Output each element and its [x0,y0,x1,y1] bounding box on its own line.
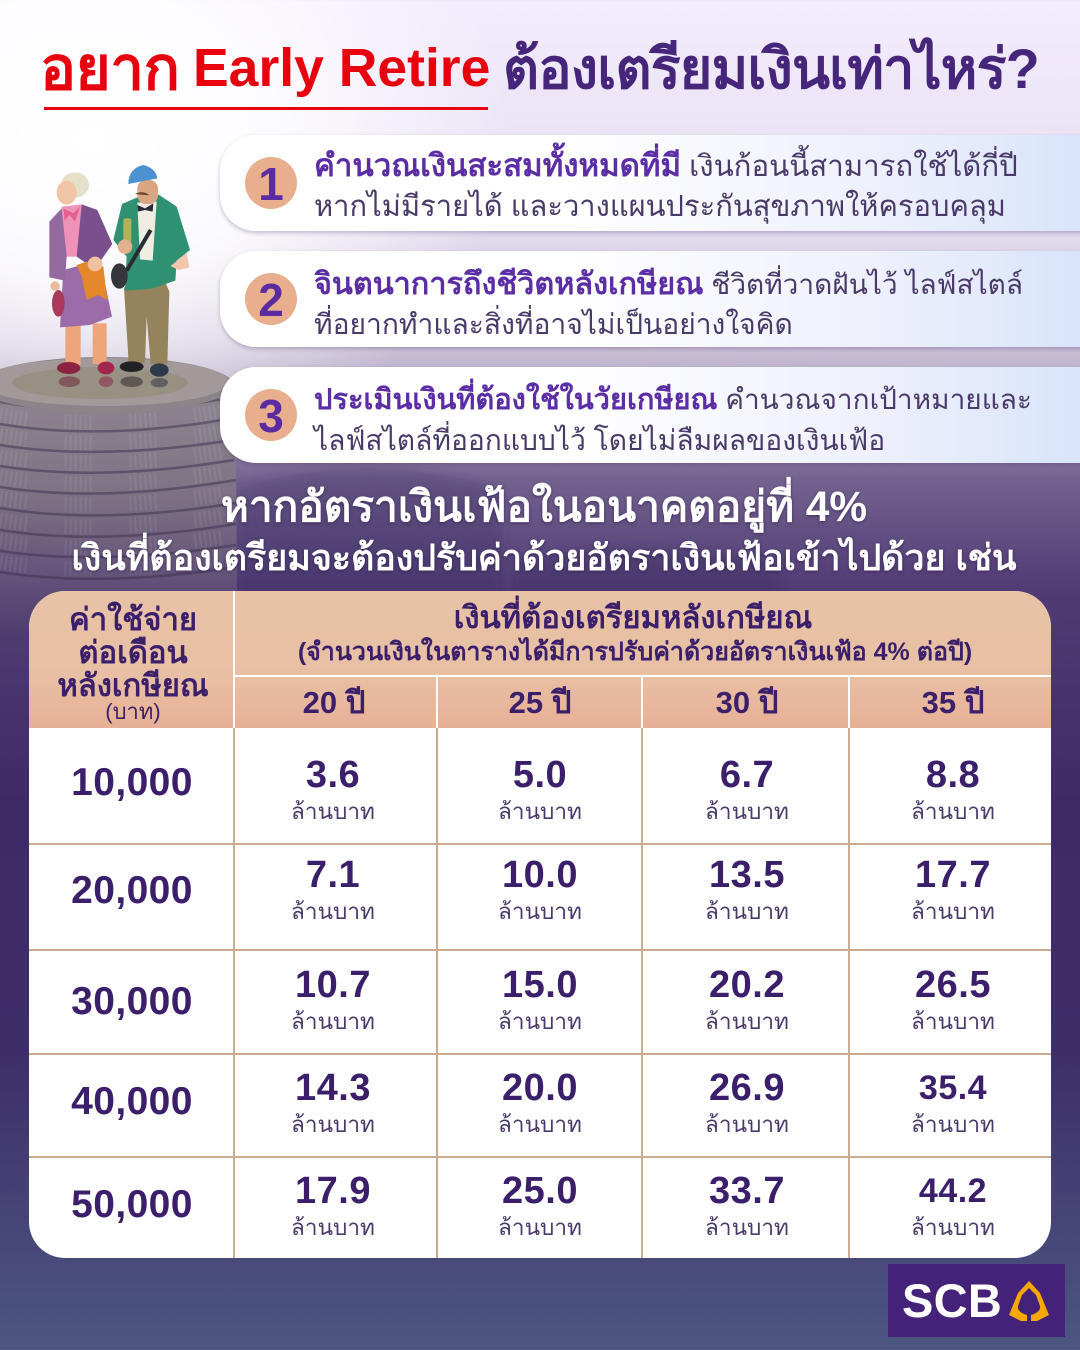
step number 2: 2 [258,274,284,326]
row 40,000: 14.3 [295,1067,371,1109]
row 10,000: 10,000 [71,761,193,804]
figurine reflections [59,376,168,387]
row 20,000: 17.7 [915,854,991,896]
subheading: หากอัตราเงินเฟ้อในอนาคตอยู่ที่ 4% [221,483,867,530]
step number 1: 1 [258,158,284,210]
row 20,000: 10.0 [502,854,578,896]
row 50,000: ล้านบาท [498,1215,582,1240]
row 20,000: 20,000 [71,869,193,912]
row 50,000: 25.0 [502,1170,578,1212]
icon: gold bai sema [1009,1281,1049,1321]
row 10,000: 5.0 [513,754,567,796]
row 30,000: 30,000 [71,980,193,1023]
coin stack photo [0,357,237,626]
column header: monthly expense: ต่อเดือน [78,635,188,670]
title: อยาก [40,35,180,102]
row 30,000: 15.0 [502,964,578,1006]
row 30,000: 26.5 [915,964,991,1006]
row 40,000: 26.9 [709,1067,785,1109]
year columns: 25 ปี [509,685,571,720]
row 10,000: ล้านบาท [291,799,375,824]
row 40,000: 35.4 [919,1069,987,1107]
step number 3 [245,389,297,441]
row 40,000: ล้านบาท [911,1112,995,1137]
row 20,000: ล้านบาท [911,899,995,924]
column header: savings needed [298,596,972,666]
row 10,000: ล้านบาท [498,799,582,824]
row 50,000 [71,1170,995,1240]
step number 1 [245,157,297,209]
row 30,000: 20.2 [709,964,785,1006]
background blurred coin stacks [236,466,770,580]
old couple figurines [49,165,190,388]
step 1 text: หากไม่มีรายได้ และวางแผนประกันสุขภาพให้ครอบคลุม [314,191,1006,223]
man figurine [111,165,190,377]
row 40,000 [71,1067,995,1137]
column header: monthly expense: (บาท) [105,699,161,724]
row 30,000: 10.7 [295,964,371,1006]
row 50,000: 50,000 [71,1183,193,1226]
row 50,000: ล้านบาท [705,1215,789,1240]
column header: savings needed: (จำนวนเงินในตารางได้มีการปรับค่าด้วยอัตราเงินเฟ้อ 4% ต่อปี) [298,638,972,666]
step 2 text: ที่อยากทำและสิ่งที่อาจไม่เป็นอย่างใจคิด [314,308,793,340]
table header [29,591,1051,728]
row 40,000: ล้านบาท [705,1112,789,1137]
panel: step 2 [220,251,1080,347]
row 20,000: 7.1 [306,854,360,896]
step 1 text: คำนวณเงินสะสมทั้งหมดที่มี เงินก้อนนี้สามารถใช้ได้กี่ปี [314,148,1018,183]
row 30,000 [71,964,995,1034]
row 30,000: ล้านบาท [705,1009,789,1034]
column header: savings needed: เงินที่ต้องเตรียมหลังเกษียณ [454,600,812,635]
row 40,000: ล้านบาท [498,1112,582,1137]
row 50,000: 44.2 [919,1172,987,1210]
row 20,000: ล้านบาท [291,899,375,924]
step 3 text: ไลฟ์สไตล์ที่ออกแบบไว้ โดยไม่ลืมผลของเงินเฟ้อ [314,424,885,456]
row 20,000: 13.5 [709,854,785,896]
panel: step 1 [220,135,1080,231]
year columns: 20 ปี [303,685,365,720]
row 50,000: ล้านบาท [291,1215,375,1240]
background glow [0,0,620,430]
logo wordmark: SCB [902,1274,1002,1327]
row 30,000: ล้านบาท [291,1009,375,1034]
step 3 text: ประเมินเงินที่ต้องใช้ในวัยเกษียณ คำนวณจากเป้าหมายและ [314,384,1032,416]
column header: monthly expense: ค่าใช้จ่าย [69,602,197,637]
step number 2 [245,273,297,325]
year columns: 35 ปี [922,685,984,720]
step 3 text [312,378,1032,456]
row 50,000: ล้านบาท [911,1215,995,1240]
row 10,000: 6.7 [720,754,774,796]
row 20,000: ล้านบาท [705,899,789,924]
step number 3: 3 [258,390,284,442]
row 20,000 [71,854,995,924]
subheading: เงินที่ต้องเตรียมจะต้องปรับค่าด้วยอัตราเงินเฟ้อเข้าไปด้วย เช่น [72,538,1016,578]
title: ต้องเตรียมเงินเท่าไหร่? [503,38,1039,100]
row 20,000: ล้านบาท [498,899,582,924]
SCB logo [888,1264,1065,1337]
title [40,35,1039,102]
row 30,000: ล้านบาท [911,1009,995,1034]
row 30,000: ล้านบาท [498,1009,582,1034]
row 40,000: 20.0 [502,1067,578,1109]
year columns [303,685,984,720]
row 50,000: 17.9 [295,1170,371,1212]
row 40,000: 40,000 [71,1080,193,1123]
column header: monthly expense: หลังเกษียณ [57,668,209,703]
column header: monthly expense [57,602,209,724]
row 10,000 [71,754,995,824]
row 50,000: 33.7 [709,1170,785,1212]
row 10,000: 8.8 [926,754,980,796]
panel: step 3 [220,367,1080,463]
step 2 text [314,265,1023,340]
step 2 text: จินตนาการถึงชีวิตหลังเกษียณ ชีวิตที่วาดฝันไว้ ไลฟ์สไตล์ [314,267,1023,301]
row 40,000: ล้านบาท [291,1112,375,1137]
row 10,000: ล้านบาท [705,799,789,824]
year columns: 30 ปี [716,685,778,720]
title: Early Retire [193,39,490,98]
row 10,000: ล้านบาท [911,799,995,824]
subheading [72,476,1017,578]
row 10,000: 3.6 [306,754,360,796]
step 1 text [314,142,1018,224]
retirement savings table [29,591,1051,1258]
woman figurine [49,172,114,374]
title underline [44,107,488,110]
